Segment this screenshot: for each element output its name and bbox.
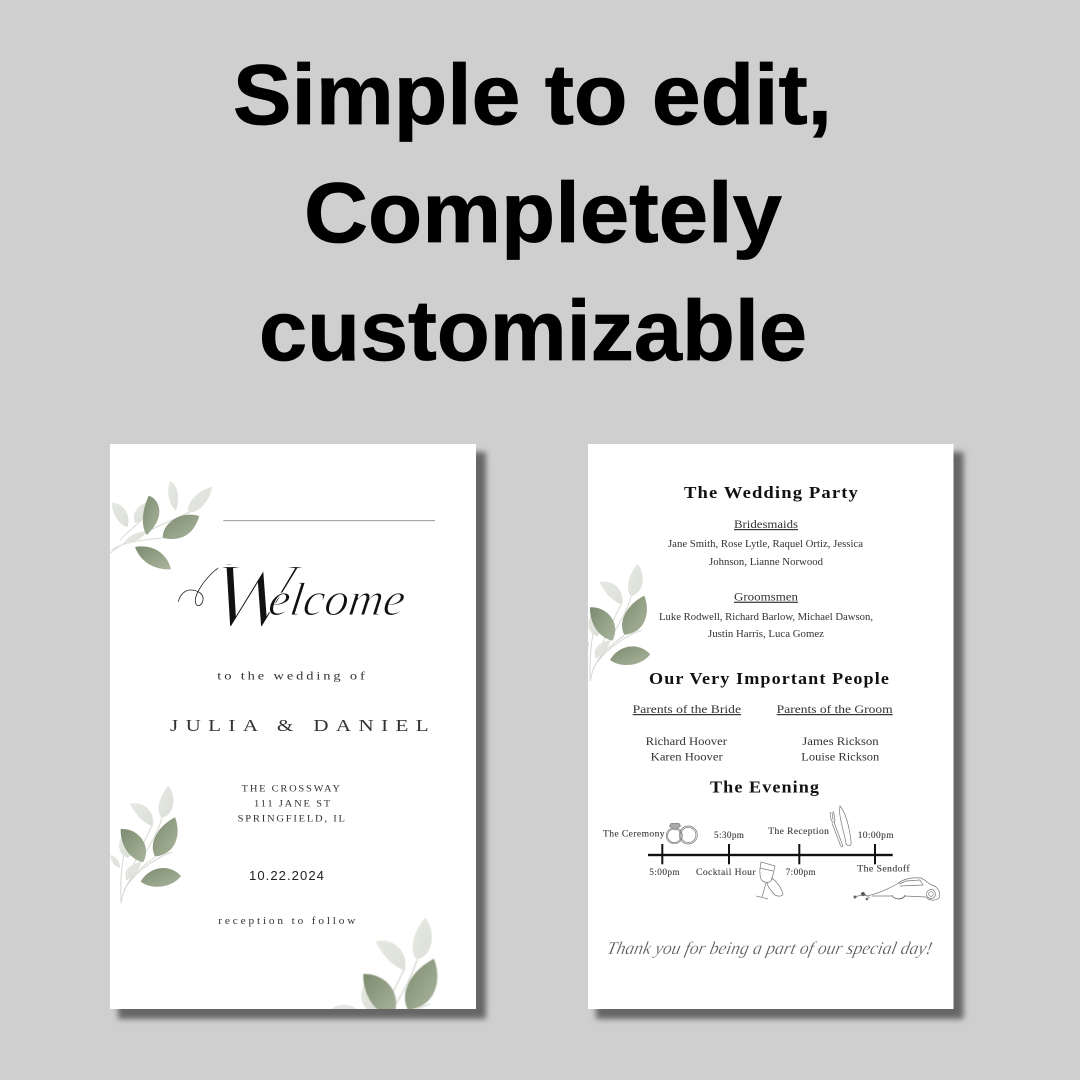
icon: top-left leaf sprig <box>110 481 212 569</box>
timeline chart: The Sendoff <box>857 864 910 875</box>
section: parents of the bride: Karen Hoover <box>651 750 723 764</box>
text: venue: SPRINGFIELD, IL <box>238 815 347 825</box>
heading: The Evening: The Evening <box>710 778 820 797</box>
section: groomsmen: Luke Rodwell, Richard Barlow, Michael Dawson, <box>659 612 873 623</box>
text: venue <box>238 785 347 825</box>
timeline chart: 5:30pm <box>714 831 744 841</box>
heading: The Wedding Party: The Wedding Party <box>684 483 859 502</box>
title <box>233 48 832 379</box>
title: Simple to edit, <box>233 48 832 143</box>
section: parents of the bride <box>633 702 741 764</box>
title: Completely <box>304 166 782 261</box>
section: bridesmaids: Jane Smith, Rose Lytle, Raquel Ortiz, Jessica <box>668 539 864 550</box>
timeline chart: The Reception <box>768 827 829 837</box>
text: venue: 111 JANE ST <box>254 800 332 810</box>
section: parents of the groom: Parents of the Groom <box>777 702 893 716</box>
divider line <box>223 520 435 521</box>
timeline chart <box>603 827 910 878</box>
section: groomsmen <box>659 590 873 640</box>
heading: Our Very Important People: Our Very Important People <box>649 669 890 688</box>
text: date: 10.22.2024 <box>249 869 325 883</box>
script heading: Welcome: elcome <box>265 574 409 626</box>
script heading: Welcome <box>178 544 409 646</box>
script heading: Welcome: W <box>205 544 307 646</box>
section: bridesmaids <box>668 517 864 568</box>
section: parents of the groom: Louise Rickson <box>801 750 879 764</box>
icon: mid-left leaf sprig <box>110 786 181 903</box>
section: parents of the groom: James Rickson <box>802 734 879 748</box>
icon: champagne glass <box>756 862 783 899</box>
text: couple names: JULIA & DANIEL <box>170 716 436 735</box>
timeline chart: 10:00pm <box>858 831 894 841</box>
section: bridesmaids: Johnson, Lianne Norwood <box>709 557 823 568</box>
timeline chart: The Ceremony <box>603 830 665 840</box>
timeline chart: 5:00pm <box>649 868 680 878</box>
icon: leaf sprig <box>588 564 650 682</box>
section: parents of the bride: Parents of the Bride <box>633 702 741 716</box>
script text: thank you: Thank you for being a part of our special day! <box>605 938 934 958</box>
panel: program card <box>579 444 964 1019</box>
section: bridesmaids: Bridesmaids <box>734 517 798 531</box>
timeline chart: 7:00pm <box>786 868 816 878</box>
icon: getaway car <box>854 878 940 900</box>
timeline chart: Cocktail Hour <box>696 868 756 878</box>
section: groomsmen: Groomsmen <box>734 590 798 604</box>
section: parents of the groom <box>777 702 893 764</box>
text: to the wedding of: to the wedding of <box>217 668 368 682</box>
section: groomsmen: Justin Harris, Luca Gomez <box>708 629 825 640</box>
section: parents of the bride: Richard Hoover <box>646 734 727 748</box>
text: reception to follow: reception to follow <box>218 916 358 927</box>
icon: fork and knife <box>830 806 851 847</box>
icon: rings <box>666 824 697 844</box>
icon: bottom-right leaf sprig <box>332 918 438 1009</box>
title: customizable <box>259 284 807 379</box>
text: venue: THE CROSSWAY <box>242 785 342 795</box>
panel: welcome card <box>110 444 486 1070</box>
